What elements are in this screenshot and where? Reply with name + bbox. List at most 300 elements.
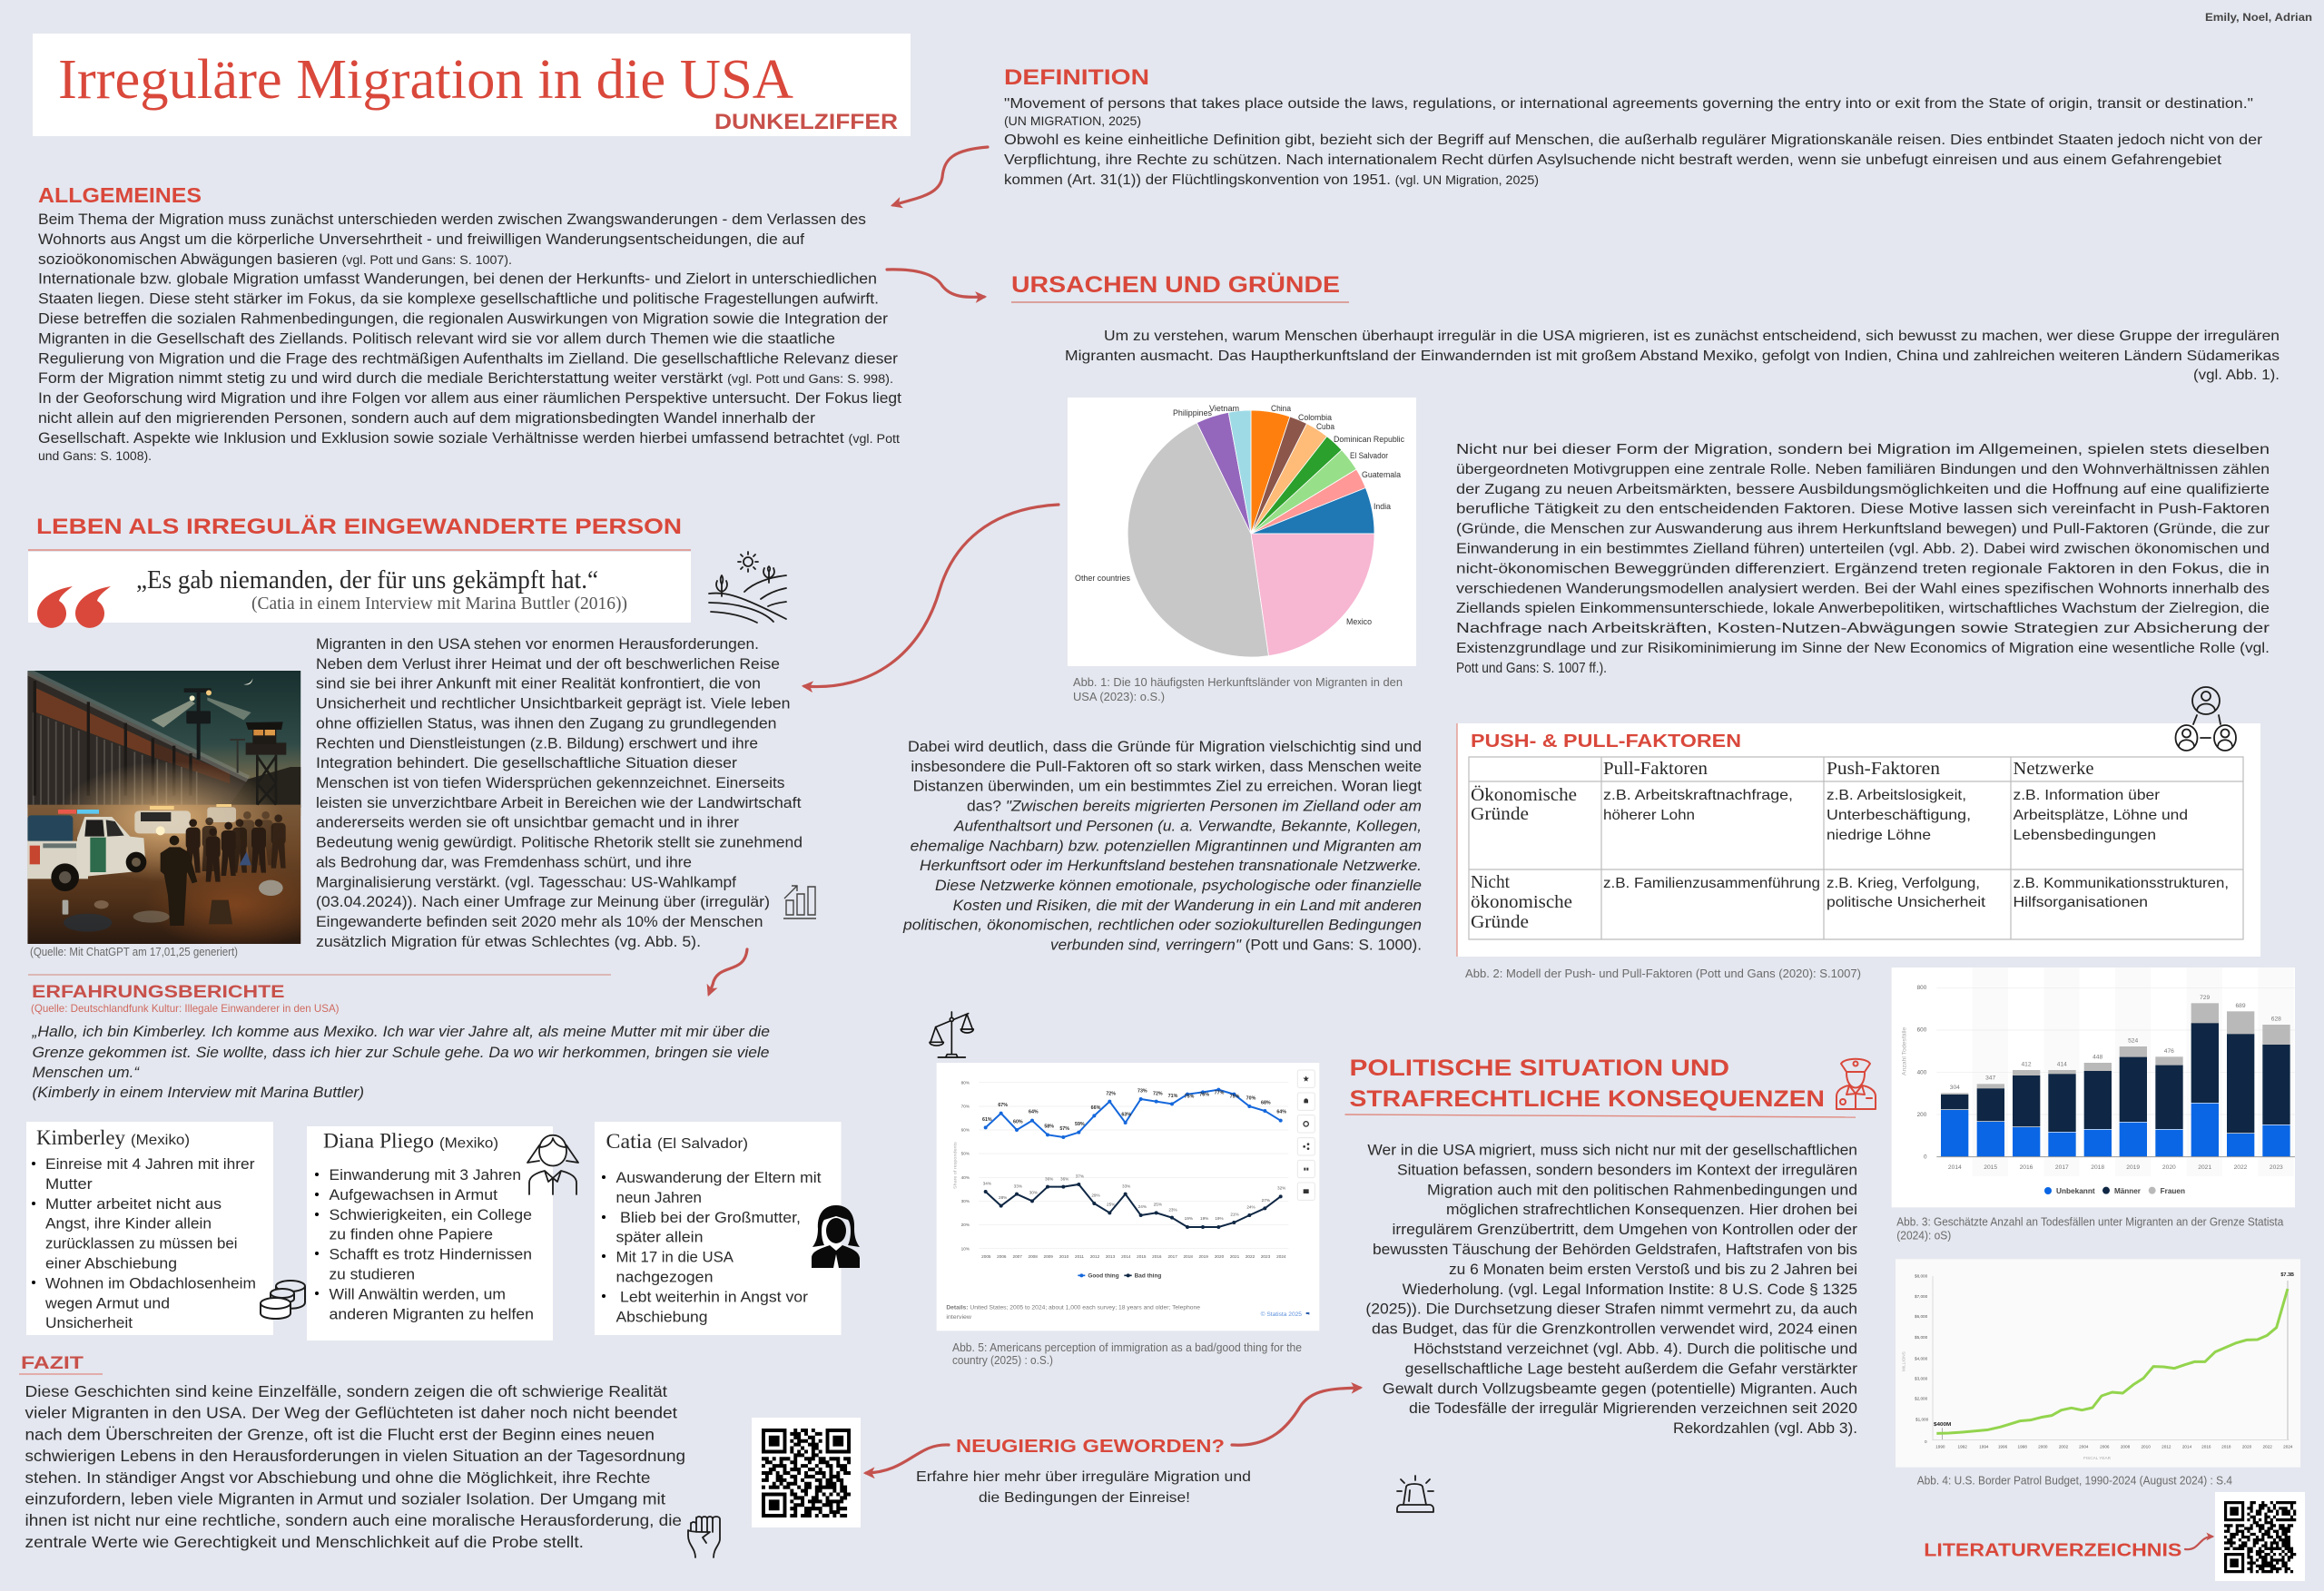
text: Politische Situation: das Budget, das für die Grenzkontrollen verwendet wird, 2024 einen [1372,1321,1857,1338]
text: Fazit: vieler Migranten in den USA. Der Weg der Geflüchteten ist daher noch nicht beendet [25,1404,677,1422]
y axis labels: $4,000 [1915,1356,1928,1360]
series: good thing: 73% [1137,1088,1147,1094]
bar totals [1950,995,2281,1091]
title panel [33,34,911,136]
arrow: Leben to Erfahrungsberichte [709,949,747,994]
heading: Push & Pull: PUSH- & PULL-FAKTOREN [1471,732,1741,751]
x axis years: 2011 [1075,1254,1084,1259]
panel: Leben als irregulaer eingewanderte Person [28,515,786,628]
icon: woman [812,1205,860,1268]
icon: fields and sun [709,552,786,623]
pie labels: El Salvador [1350,451,1388,460]
text: Push-Pull paragraph: (Gründe, die Menschen zur Auswanderung aus ihrem Herkunftsland bewegen) und Pull-Faktoren (Gründe, die zur [1456,522,2270,537]
QR code: Literaturverzeichnis [2215,1492,2305,1581]
series: bad thing: 19% [1215,1216,1224,1221]
text: Allgemeines: sozioökonomischen Abwägungen basieren (vgl. Pott und Gans: S. 1007). [38,251,512,268]
series: good thing: 64% [1029,1110,1039,1115]
series: good thing: 70% [1246,1095,1256,1101]
ground details [64,914,112,932]
x axis years: 2009 [1043,1254,1053,1259]
text: Allgemeines: Migranten in die Gesellschaft des Ziellands. Politisch relevant wird sie vor allem durch Themen wie die staatliche [38,330,835,347]
y axis labels: MILLIONS [1902,1351,1906,1371]
card: Kimberley: zurücklassen zu müssen bei [45,1236,238,1252]
y axis labels: $8,000 [1915,1274,1928,1279]
pie labels: India [1374,502,1391,511]
text: Push-Pull paragraph: Ziellands spielen Einkommensunterschiede, lokale Anwerbepolitiken, wirtschaftliches Wachstum der Zielregion, die [1456,601,2270,616]
pie labels: Mexico [1346,617,1372,626]
x axis labels [1935,1444,2293,1460]
text: Allgemeines: Staaten liegen. Diese steht stärker im Fokus, da sie komplexe gesellschaftliche und politische Fragestellungen aufwirft. [38,291,879,308]
x axis labels: 2008 [2121,1444,2131,1449]
card: Kimberley: wegen Armut und [44,1295,170,1311]
text: Politische Situation: Gewalt durch Vollzugsbeamte gegen (potentielle) Migranten. Auch [1383,1380,1857,1397]
card: Diana Pliego: Schwierigkeiten, ein College [329,1207,532,1223]
series: good thing: 58% [1044,1125,1054,1130]
text: Politische Situation: Höchststand verzeichnet (vgl. Abb. 4). Durch die politische und [1413,1341,1857,1358]
series: bad thing: 24% [1138,1204,1147,1209]
x axis labels: 2002 [2059,1444,2069,1449]
series: good thing: 57% [1059,1126,1069,1132]
x axis years [1948,1164,2283,1171]
text: Leben body: Menschen ist von tiefen Widersprüchen gekennzeichnet. Einerseits [316,775,784,791]
card: Kimberley: Angst, ihre Kinder allein [45,1216,212,1233]
card: Catia: Lebt weiterhin in Angst vor [620,1289,809,1305]
bar totals: 729 [2200,995,2211,1001]
panel: Definition [1004,65,2263,188]
text: Leben body: (03.04.2024)). Nach einer Umfrage zur Meinung über (irregulär) [316,894,770,910]
text: Allgemeines: Internationale bzw. globale Migration umfasst Wanderungen, bei denen der Herkunfts- und Zielort in unterschiedlichen [38,271,877,288]
caption: Abb. 3 [1896,1216,2283,1242]
legend [2044,1187,2185,1195]
series: bad thing: 36% [1060,1176,1068,1181]
series: bad thing: 33% [1014,1183,1022,1188]
source note: (Quelle: Deutschlandfunk Kultur: Illegale Einwanderer in den USA) [31,1002,340,1015]
text: Politische Situation: Rekordzahlen (vgl. Abb 3). [1673,1420,1857,1437]
series: good thing: 77% [1215,1090,1225,1095]
table row: Oekonomische Gruende: Arbeitsplätze, Löhne und [2014,808,2188,823]
y axis labels: 200 [1917,1112,1927,1118]
card: Catia: Blieb bei der Großmutter, [620,1210,801,1226]
heading: Politische Situation [1349,1056,1825,1112]
callouts: 400M and 7.3B: $400M [1934,1422,1952,1428]
card: Diana Pliego: (Mexiko) [439,1136,498,1151]
text: Definition: kommen (Art. 31(1)) der Flüchtlingskonvention von 1951. (vgl. UN Migration, 2025) [1004,172,1539,188]
text: Push-Pull paragraph [1456,442,2270,676]
pie labels: China [1271,404,1291,413]
text: Politische Situation: irregulärem Grenzübertritt, dem Umgehen von Kontrollen oder der [1393,1222,1858,1238]
series: good thing: 66% [1091,1105,1101,1111]
text: Leben body: andererseits werden sie oft unsichtbar gemacht und in ihrer [316,815,740,831]
table row: Oekonomische Gruende: Ökonomische [1471,784,1577,805]
x axis years: 2018 [2091,1164,2104,1171]
y axis labels: $5,000 [1915,1335,1928,1340]
caption: Abb. 3: (2024): oS) [1896,1230,1951,1242]
x axis years: 2014 [1948,1164,1962,1171]
card: Diana Pliego: Will Anwältin werden, um [329,1286,506,1302]
x axis years: 2016 [2020,1164,2034,1171]
y axis labels: 400 [1917,1069,1927,1075]
details note: interview [946,1315,972,1321]
quote box [28,552,691,623]
card: Diana Pliego: zu finden ohne Papiere [329,1227,493,1243]
card: Diana Pliego: Schafft es trotz Hindernissen [329,1247,532,1263]
text: Fazit: schwierigen Lebens in den Herausforderungen in vielen Situation an der Tagesordnung [25,1447,685,1465]
icon: coins [261,1281,305,1319]
table row: Nicht oekonomische Gruende: z.B. Krieg, Verfolgung, [1827,876,1980,891]
text: Politische Situation: (2025)). Die Durchsetzung dieser Strafen nimmt vermehrt zu, da auch [1365,1301,1857,1318]
icon: fist [688,1517,720,1557]
text: Leben body: zusätzlich Migration für etwas Schlechtes (vg. Abb. 5). [316,934,701,950]
legend: Bad thing [1135,1273,1162,1279]
authors: Emily, Noel, Adrian [2205,11,2312,24]
x axis years: 2022 [1246,1254,1256,1259]
series: good thing: 76% [1199,1092,1209,1097]
quote box: „Es gab niemanden, der für uns gekämpft hat.“ [136,566,598,594]
text: Dabei wird deutlich: Herkunftsort oder im Herkunftsland bestehen transnationale Netzwerke. [920,858,1422,874]
legend: Unbekannt [2056,1187,2095,1195]
text: Definition: (UN MIGRATION, 2025) [1004,114,1141,128]
table row: Oekonomische Gruende: z.B. Arbeitslosigkeit, [1827,788,1966,803]
x axis years: 2021 [2198,1164,2211,1171]
text: Allgemeines: In der Geoforschung wird Migration und ihre Folgen vor allem aus einer räumlichen Perspektive untersucht. Der Fokus liegt [38,390,901,407]
text: Politische Situation: Wiederholung. (vgl. Legal Information Instite: 8 U.S. Code § 1325 [1403,1282,1857,1298]
callouts: 400M and 7.3B: $7.3B [2280,1272,2294,1278]
heading: Fazit: FAZIT [21,1354,84,1373]
card: Catia: Catia [606,1130,652,1153]
card: Catia: (El Salvador) [657,1136,748,1152]
text: Fazit: nach dem Überschreiten der Grenze, oft ist die Flucht erst der Beginn eines neuen [25,1425,655,1443]
card: Catia: Mit 17 in die USA [615,1250,734,1266]
x axis years: 2015 [1137,1254,1147,1259]
y axis labels: 50% [961,1152,970,1156]
callout: Neugierig geworden: NEUGIERIG GEWORDEN? [956,1437,1225,1457]
x axis years: 2024 [1276,1254,1286,1259]
series: bad thing: 19% [1200,1216,1208,1221]
interview quote [31,1024,770,1101]
heading: Definition: DEFINITION [1004,65,1149,90]
text: Dabei wird deutlich: Kosten und Risiken, die mit der Wanderung in ein Land mit anderen [953,898,1422,914]
bar totals: 628 [2271,1016,2281,1023]
text: Fazit: Diese Geschichten sind keine Einzelfälle, sondern zeigen die oft schwierige Realität [25,1382,667,1400]
series: bad thing: 36% [1045,1176,1053,1181]
text: Politische Situation: die Todesfälle der irregulär Migrierenden verzeichnen seit 2020 [1409,1400,1857,1417]
card: Kimberley: (Mexiko) [131,1133,190,1148]
budget line [1936,1289,2288,1433]
pie labels [1075,404,1404,626]
panel: Fazit [19,1354,720,1557]
series: bad thing [983,1174,1285,1229]
pie labels: Colombia [1298,413,1332,422]
text: Leben body: ohne offiziellen Status, was ihnen den Zugang zu grundlegenden [316,715,777,732]
card: Kimberley: Wohnen im Obdachlosenheim [45,1275,256,1291]
x axis years: 2005 [981,1254,991,1259]
card: Catia: nachgezogen [615,1269,714,1285]
text: Push-Pull paragraph: Nachfrage nach Arbeitskräften, Kosten-Nutzen-Abwägungen sowie Strategien zur Absicherung der [1456,621,2270,636]
y axis labels [1901,985,1927,1161]
card: Diana Pliego: Diana Pliego [323,1129,434,1153]
text: Allgemeines: und Gans: S. 1008). [38,449,152,463]
bar totals: 448 [2093,1054,2103,1060]
y axis labels: 0 [1924,1154,1927,1161]
text: Push-Pull paragraph: Pott und Gans: S. 1007 ff.). [1456,661,1607,676]
series: bad thing: 24% [1246,1204,1256,1209]
text: Push-Pull paragraph: der Zugang zu neuen Arbeitsmärkten, bessere Ausbildungsmöglichkeiten und die Hoffnung auf eine qualifizierte [1456,482,2270,497]
card: Kimberley: einer Abschiebung [45,1256,177,1272]
heading: Literaturverzeichnis: LITERATURVERZEICHNIS [1924,1540,2181,1560]
x axis years: 2006 [997,1254,1007,1259]
y axis labels: 10% [961,1246,970,1251]
series: bad thing: 37% [1076,1174,1084,1179]
icon: girl [527,1135,578,1194]
y axis labels: Share of respondents [952,1142,957,1189]
details note: © Statista 2025 [1261,1311,1303,1318]
text: Ursachen intro: Migranten ausmacht. Das Hauptherkunftsland der Einwandernden ist mit großem Abstand Mexiko, gefolgt von Indien, China und zahlreichen weiteren Ländern Südamerikas [1065,349,2280,364]
gridlines [979,1083,1288,1249]
text: Dabei wird deutlich: verbunden sind, verringern" (Pott und Gans: S. 1000). [1050,937,1422,953]
x axis labels: 1992 [1957,1444,1967,1449]
series: good thing [982,1088,1286,1139]
table header: Netzwerke [2014,759,2094,779]
arrow: Neugierig to Politische Situation [1232,1388,1360,1445]
card: Diana Pliego: Einwanderung mit 3 Jahren [329,1167,521,1183]
panel: Push- und Pull-Faktoren table [1457,723,2260,957]
text: Dabei wird deutlich: ehemalige Nachbarn) bzw. potenziellen Migrantinnen und Migranten am [911,838,1422,854]
text: Dabei wird deutlich: Dabei wird deutlich, dass die Gründe für Migration vielschichtig sind und [908,739,1422,755]
series: bad thing: 32% [1277,1185,1285,1190]
pie labels: Vietnam [1209,404,1239,413]
series: good thing: 75% [1230,1095,1240,1100]
y axis labels: 0 [1925,1439,1927,1444]
text: Ursachen intro: Um zu verstehen, warum Menschen überhaupt irregulär in die USA migrieren, ist es zunächst entscheidend, sich bewusst zu machen, wer diese Gruppe der irregulären [1104,329,2280,344]
x axis years: 2021 [1230,1254,1240,1259]
icon: quotation marks [37,586,111,628]
text: Allgemeines: Wohnorts aus Angst um die körperliche Unversehrtheit - und freiwilligen Wanderungsentscheidungen, die auf [38,231,804,248]
bar totals: 347 [1985,1075,1996,1082]
table row: Oekonomische Gruende: niedrige Löhne [1827,828,1931,843]
text: Fazit: zentrale Werte wie Gerechtigkeit und Menschlichkeit auf die Probe stellt. [25,1533,584,1551]
series: good thing: 63% [1121,1112,1131,1117]
arrow: Allgemeines to Ursachen [887,270,984,297]
x axis labels: 2012 [2162,1444,2171,1449]
table row: Nicht oekonomische Gruende: z.B. Familienzusammenführung [1603,876,1820,891]
text: Definition: "Movement of persons that takes place outside the laws, regulations, or international agreements governing the entry into or exit from the State of origin, transit or destination." [1004,96,2253,112]
text: Leben body: leisten sie unverzichtbare Arbeit in Bereichen wie der Landwirtschaft [316,795,802,811]
title: Irreguläre Migration in die USA [58,49,793,111]
series: good thing: 61% [982,1117,992,1123]
card: Catia [595,1122,841,1335]
caption: Abb. 1 [1073,676,1403,703]
y axis labels: 20% [961,1223,970,1227]
series: good thing: 60% [1013,1120,1023,1125]
text: Leben body: sind sie bei ihrer Ankunft mit einer Realität konfrontiert, die von [316,676,761,692]
y axis labels: 40% [961,1175,970,1180]
heading: Allgemeines: ALLGEMEINES [38,183,202,207]
text: Leben body: Bedeutung wenig gewürdigt. Politische Rhetorik stellt sie zunehmend [316,835,803,851]
text: Leben body: Eingewanderte befinden seit 2020 mehr als 10% der Menschen [316,914,763,930]
x axis years: 2012 [1090,1254,1100,1259]
text: Leben body: Neben dem Verlust ihrer Heimat und der oft beschwerlichen Reise [316,656,780,673]
pie labels: Dominican Republic [1334,435,1404,444]
series: bad thing: 25% [1107,1203,1115,1207]
text: Dabei wird deutlich: Diese Netzwerke können emotionale, psychologische oder finanzielle [935,878,1422,894]
x axis years: 2019 [1198,1254,1208,1259]
heading: Erfahrungsberichte: ERFAHRUNGSBERICHTE [32,983,285,1002]
series: bad thing: 27% [1262,1198,1270,1203]
caption: Abb. 5 [952,1341,1302,1367]
bar totals: 689 [2235,1003,2246,1009]
x axis years: 2010 [1059,1254,1069,1259]
toolbar buttons [1297,1070,1315,1200]
y axis labels: 30% [961,1199,970,1203]
series: good thing: 64% [1276,1110,1286,1115]
icon: police officer [1837,1059,1876,1109]
gridlines [1936,987,2295,1115]
heading: Leben: LEBEN ALS IRREGULÄR EINGEWANDERTE PERSON [36,515,682,539]
arrow: pie to Leben text [804,505,1059,687]
text: Push-Pull paragraph: berufliche Tätigkeit zu den entscheidenden Faktoren. Diese Motive lassen sich vereinfacht in Push-Faktoren [1456,502,2270,517]
series: bad thing: 23% [1168,1207,1177,1212]
bar totals: 476 [2164,1048,2174,1055]
card: Diana Pliego: anderen Migranten zu helfen [329,1306,534,1322]
series: good thing: 59% [1075,1122,1085,1127]
x axis labels: 2024 [2283,1444,2293,1449]
legend [1078,1273,1162,1279]
series: bad thing: 30% [1029,1191,1038,1195]
text: Politische Situation: möglichen strafrechtlichen Konsequenzen. Hier drohen bei [1446,1202,1857,1218]
bar totals: 412 [2021,1062,2032,1068]
y axis labels: 800 [1917,985,1927,991]
table row: Oekonomische Gruende: Lebensbedingungen [2014,828,2156,843]
text: Allgemeines: Form der Migration nimmt stetig zu und wird durch die mediale Berichterstattung weiter verstärkt (vgl. Pott und Gans: S. 998). [38,370,893,387]
table header: Push-Faktoren [1827,759,1940,779]
caption: photo source: (Quelle: Mit ChatGPT am 17,01,25 generiert) [30,946,238,958]
x axis labels: 2016 [2201,1444,2211,1449]
legend: Männer [2114,1187,2141,1195]
details note [946,1306,1309,1321]
caption: Abb. 5: country (2025) : o.S.) [952,1354,1053,1367]
text: Allgemeines: Gesellschaft. Aspekte wie Inklusion und Exklusion sowie soziale Verhältnisse werden hierbei umfassend betrachtet (vgl. Pott [38,430,900,447]
series: good thing: 68% [1261,1100,1271,1105]
series: good thing: 75% [1185,1095,1195,1100]
y axis labels: $2,000 [1915,1397,1928,1401]
y axis labels: 70% [961,1105,970,1109]
table header: Pull-Faktoren [1603,759,1708,779]
table row: Oekonomische Gruende: Gründe [1471,804,1529,824]
text: Politische Situation: gesellschaftliche Lage besteht außerdem die Gefahr verstärkter [1405,1360,1858,1377]
text: Push-Pull paragraph: übergeordneten Motivgruppen eine zentrale Rolle. Neben familiären Bindungen und den Wohnverhältnissen zählen [1456,462,2270,477]
quote box: (Catia in einem Interview mit Marina Buttler (2016)) [251,594,627,614]
text: Politische Situation: Migration auch mit den politischen Rahmenbedingungen und [1427,1182,1857,1198]
text: Neugierig [916,1469,1251,1506]
text: Leben body: Migranten in den USA stehen vor enormen Herausforderungen. [316,636,759,653]
bar chart: Abb. 3 [1892,967,2295,1207]
text: Definition: Obwohl es keine einheitliche Definition gibt, bezieht sich der Begriff auf Menschen, die außerhalb regulärer Migrationskanäle reisen. Dies entbindet Staaten jedoch nicht von der [1004,133,2263,148]
arrow: Definition to Allgemeines [893,147,988,205]
text: Allgemeines: nicht allein auf den migrierenden Personen, sondern auch auf dem migrationsbedingten Wandel innerhalb der [38,410,816,427]
callouts: 400M and 7.3B [1934,1272,2294,1428]
text: Allgemeines: Diese betreffen die sozialen Rahmenbedingungen, die regionalen Auswirkungen von Migration sowie die Integration der [38,310,889,327]
text: Ursachen intro [1065,329,2280,383]
text: Dabei wird deutlich: das? "Zwischen bereits migrierten Personen im Zielland oder am [967,799,1422,815]
table row: Nicht oekonomische Gruende: Hilfsorganisationen [2014,895,2148,910]
text: Leben body [316,636,803,950]
panel: Politische Situation [1345,1056,1876,1512]
series: good thing: 67% [998,1103,1008,1108]
caption: Abb. 2: Abb. 2: Modell der Push- und Pull-Faktoren (Pott und Gans (2020): S.1007) [1465,967,1861,980]
pie chart: Abb. 1 [1068,398,1416,666]
text: Push-Pull paragraph: Existenzgrundlage und zur Risikominimierung im Sinne der New Economics of Migration eine wesentliche Rolle (vgl. [1456,641,2270,656]
text: Politische Situation: Situation befassen, sondern besonders im Kontext der irregulären [1397,1162,1857,1178]
x axis years: 2014 [1121,1254,1131,1259]
card: Kimberley: Einreise mit 4 Jahren mit ihrer [45,1156,255,1173]
legend: Frauen [2161,1187,2185,1195]
line chart: Abb. 5 [937,1063,1319,1331]
x axis labels: 1994 [1979,1444,1989,1449]
x axis labels: 1998 [2017,1444,2027,1449]
series: good thing: 71% [1168,1094,1178,1099]
series: bad thing: 33% [1122,1183,1130,1188]
interview quote: (Kimberly in einem Interview mit Marina Buttler) [33,1085,364,1101]
line chart: Abb. 4 [1896,1259,2300,1468]
table row: Nicht oekonomische Gruende: z.B. Kommunikationsstrukturen, [2014,876,2229,891]
card: Diana Pliego [307,1126,553,1341]
callout: Neugierig geworden [916,1437,1251,1506]
x axis years: 2020 [2162,1164,2176,1171]
caption: Abb. 1: Abb. 1: Die 10 häufigsten Herkunftsländer von Migranten in den [1073,676,1403,689]
heading: Politische Situation: POLITISCHE SITUATION UND [1349,1056,1729,1081]
y axis labels: $3,000 [1915,1376,1928,1380]
series: bad thing: 19% [1185,1216,1193,1221]
card: Catia: Abschiebung [615,1309,708,1325]
text: Neugierig: Erfahre hier mehr über irreguläre Migration und [916,1469,1251,1485]
pie labels: Cuba [1316,422,1334,431]
y axis labels: 600 [1917,1027,1927,1034]
x axis labels: 2010 [2141,1444,2151,1449]
pie labels: Other countries [1075,574,1130,583]
table header [1603,759,2094,779]
text: Push-Pull paragraph: Nicht nur bei dieser Form der Migration, sondern bei Migration im Allgemeinen, spielen stets dieselben [1456,442,2270,457]
text: Leben body: als Bedrohung dar, was Fremdenhass schürt, und ihre [316,855,692,871]
x axis years: 2017 [1167,1254,1177,1259]
card: Catia: Auswanderung der Eltern mit [615,1170,822,1186]
caption: Abb. 5: Abb. 5: Americans perception of immigration as a bad/good thing for the [952,1341,1302,1354]
card: Kimberley: Mutter [45,1176,93,1193]
interview quote: Menschen um.“ [33,1065,141,1081]
x axis years: 2008 [1028,1254,1038,1259]
table grid [1469,757,2243,939]
bar totals: 524 [2128,1037,2139,1044]
panel: Erfahrungsberichte [26,983,860,1341]
text: Politische Situation [1365,1142,1858,1437]
icon: bar chart growth [783,886,816,918]
officer [161,836,197,926]
text: Leben body: Unsicherheit und rechtlicher Unsichtbarkeit geprägt ist. Viele leben [316,696,790,712]
caption: Abb. 3: Abb. 3: Geschätzte Anzahl an Todesfällen unter Migranten an der Grenze Statista [1896,1216,2283,1229]
x axis years: 2018 [1183,1254,1193,1259]
y axis labels: 60% [961,1128,970,1133]
x axis years: 2022 [2234,1164,2248,1171]
series: bad thing: 29% [1091,1193,1100,1197]
y axis labels: Anzahl Todesfälle [1901,1026,1907,1075]
y axis labels [1902,1274,1929,1444]
x axis years: 2016 [1152,1254,1162,1259]
details note: Details: United States; 2005 to 2024; about 1,000 each survey; 18 years and older; Telephone [946,1306,1201,1311]
subtitle: DUNKELZIFFER [714,110,898,134]
text: Push-Pull paragraph: verschiedenen Wanderungsmodellen analysiert werden. Bei der Wahl eines spezifischen Wohnorts innerhalb des [1456,581,2270,596]
table row: Oekonomische Gruende: höherer Lohn [1603,808,1695,823]
interview quote: Grenze gekommen ist. Sie wollte, dass ich hier zur Schule gehe. Da wo wir herkommen, bringen sie viele [33,1045,770,1061]
series: bad thing: 21% [1230,1213,1239,1217]
